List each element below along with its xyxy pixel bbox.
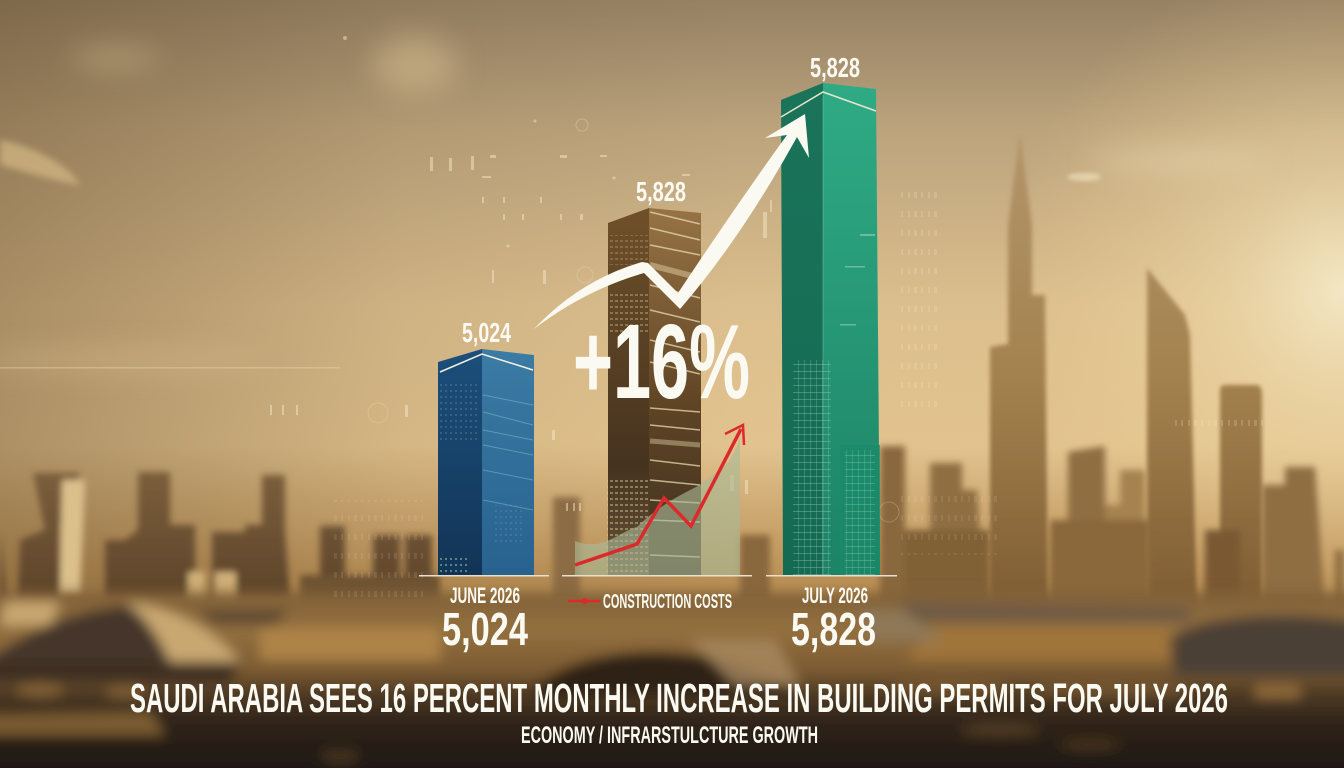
chart: red construction cost arrow	[575, 425, 744, 565]
bar: June 2026 (blue)	[438, 349, 534, 575]
label: July bar value: 5,828	[810, 52, 860, 83]
label: July 2026: JULY 2026	[802, 583, 868, 608]
chart: construction cost area	[575, 437, 740, 575]
value: July 2026: 5,828	[791, 603, 876, 655]
callout: +16%: +16%	[573, 303, 750, 421]
data speck overlay	[30, 36, 1265, 600]
background: blurred ground and domes	[0, 592, 1344, 768]
label: July 2026	[791, 583, 876, 655]
label: June 2026	[442, 583, 528, 655]
subtitle: ECONOMY / INFRARSTULCTURE GROWTH	[521, 722, 818, 749]
value: June 2026: 5,024	[442, 603, 528, 655]
legend: construction costs	[568, 591, 732, 613]
legend: construction costs: CONSTRUCTION COSTS	[603, 591, 732, 613]
bar: middle (brown)	[607, 208, 701, 575]
label: June 2026: JUNE 2026	[450, 583, 520, 608]
arrow: white growth arrow	[534, 114, 809, 329]
bar: July 2026 (green)	[781, 83, 880, 575]
baseline rules	[419, 575, 897, 576]
label: June bar value: 5,024	[462, 317, 511, 348]
background: blurred skyline	[0, 132, 1344, 610]
label: middle bar value: 5,828	[636, 176, 686, 207]
